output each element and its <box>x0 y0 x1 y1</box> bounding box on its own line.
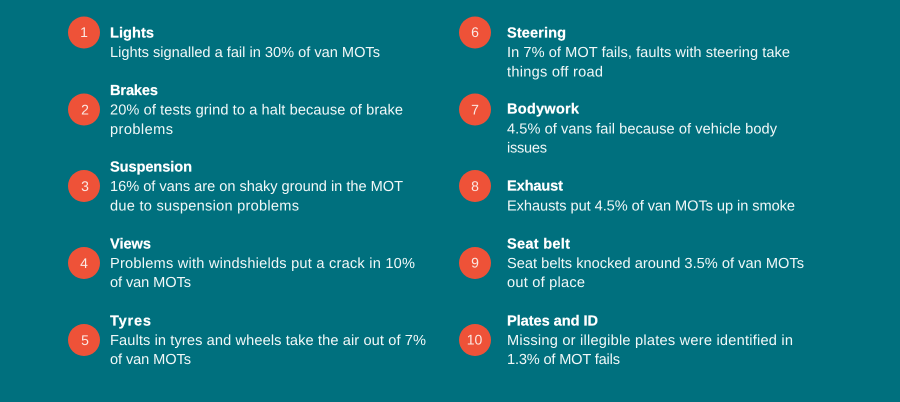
number badge 6: 6 <box>471 24 479 40</box>
number badge 1: 1 <box>80 24 88 40</box>
text: Plates and ID <box>507 314 793 368</box>
number badge 9 <box>459 247 491 279</box>
text: Exhaust: Exhausts put 4.5% of van MOTs up in smoke <box>507 198 795 214</box>
text: Tyres: Tyres <box>110 314 151 330</box>
text: Bodywork: issues <box>507 140 547 156</box>
number badge 4 <box>68 247 100 279</box>
text: Exhaust <box>507 178 795 214</box>
text: Steering: Steering <box>507 26 566 42</box>
text: Tyres: Faults in tyres and wheels take the air out of 7% <box>110 333 426 349</box>
text: Brakes: 20% of tests grind to a halt because of brake <box>110 102 403 118</box>
text: Suspension: due to suspension problems <box>110 198 299 214</box>
number badge 8: 8 <box>471 178 479 194</box>
item 1: Lights <box>68 16 380 61</box>
item 6: Steering <box>459 16 790 80</box>
text: Brakes: Brakes <box>110 83 158 99</box>
text: Seat belt: Seat belts knocked around 3.5% of van MOTs <box>507 256 804 272</box>
text: Steering: things off road <box>507 64 603 80</box>
text: Views: Views <box>110 236 151 252</box>
number badge 10 <box>459 324 491 356</box>
text: Brakes: problems <box>110 122 173 138</box>
text: Plates and ID: Missing or illegible plates were identified in <box>507 333 793 349</box>
text: Bodywork: Bodywork <box>507 102 580 118</box>
text: Seat belt: out of place <box>507 275 585 291</box>
text: Plates and ID: 1.3% of MOT fails <box>507 352 620 368</box>
text: Seat belt <box>507 236 804 291</box>
text: Exhaust: Exhaust <box>507 178 563 194</box>
text: Bodywork: 4.5% of vans fail because of vehicle body <box>507 122 778 138</box>
text: Tyres <box>110 314 426 368</box>
text: Views: Problems with windshields put a crack in 10% <box>110 256 415 272</box>
item 3: Suspension <box>68 160 403 214</box>
number badge 7 <box>459 94 491 126</box>
text: Brakes <box>110 83 403 138</box>
number badge 1 <box>68 16 100 48</box>
text: Suspension: Suspension <box>110 160 192 176</box>
text: Lights <box>110 26 380 61</box>
item 5: Tyres <box>68 314 426 368</box>
item 2: Brakes <box>68 83 403 138</box>
number badge 2 <box>68 94 100 126</box>
text: Views: of van MOTs <box>110 275 191 291</box>
text: Seat belt: Seat belt <box>507 236 570 252</box>
number badge 10: 10 <box>467 332 482 348</box>
number badge 7: 7 <box>471 102 479 118</box>
text: Plates and ID: Plates and ID <box>507 314 598 330</box>
item 10: Plates and ID <box>459 314 793 368</box>
number badge 6 <box>459 16 491 48</box>
number badge 8 <box>459 170 491 202</box>
item 8: Exhaust <box>459 170 795 214</box>
number badge 3: 3 <box>81 178 89 194</box>
text: Suspension <box>110 160 403 214</box>
number badge 9: 9 <box>471 254 479 270</box>
text: Suspension: 16% of vans are on shaky ground in the MOT <box>110 179 403 195</box>
number badge 3 <box>68 170 100 202</box>
text: Lights: Lights signalled a fail in 30% of van MOTs <box>110 45 380 61</box>
text: Tyres: of van MOTs <box>110 352 191 368</box>
number badge 5: 5 <box>81 332 89 348</box>
item 4: Views <box>68 236 415 291</box>
text: Views <box>110 236 415 291</box>
text: Bodywork <box>507 102 778 156</box>
item 9: Seat belt <box>459 236 804 291</box>
text: Steering: In 7% of MOT fails, faults with steering take <box>507 45 790 61</box>
number badge 2: 2 <box>81 102 89 118</box>
item 7: Bodywork <box>459 94 778 156</box>
text: Steering <box>507 26 790 80</box>
number badge 4: 4 <box>80 255 88 271</box>
text: Lights: Lights <box>110 26 154 42</box>
number badge 5 <box>68 324 100 356</box>
